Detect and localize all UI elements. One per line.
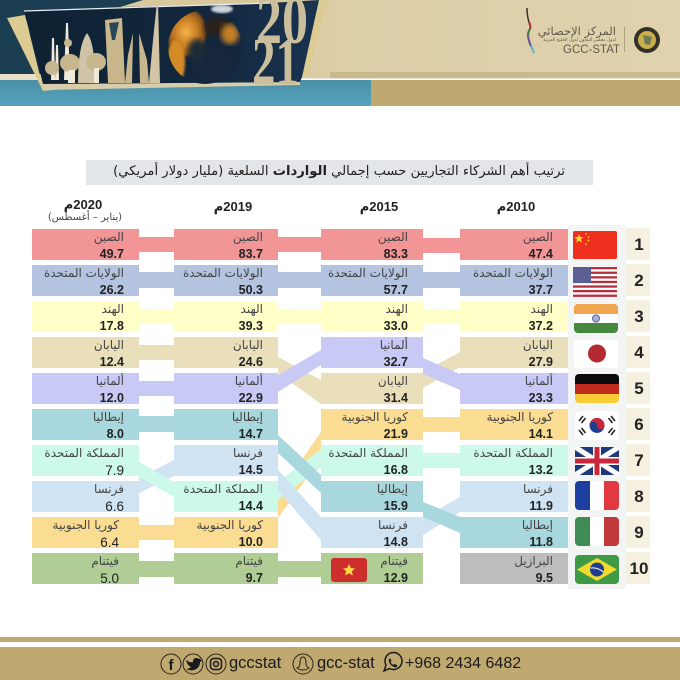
row: UK: المملكة المتحدة: [328, 446, 408, 460]
row: Vietnam: 9.7: [246, 571, 263, 585]
row: UK: المملكة المتحدة: [44, 446, 124, 460]
rank numbers: [626, 228, 650, 584]
row: France: فرنسا: [378, 518, 408, 532]
handle: gcc-stat: gcc-stat: [317, 654, 375, 672]
row: Italy: 14.7: [239, 427, 263, 441]
row: USA: الولايات المتحدة: [183, 266, 263, 280]
rank 10: 10: [630, 559, 648, 578]
row: India: الهند: [241, 302, 263, 316]
row: USA: 57.7: [384, 283, 408, 297]
rank 10: [626, 552, 650, 584]
row: Japan: اليابان: [378, 374, 408, 388]
row: India: الهند: [531, 302, 553, 316]
rank 6: [626, 408, 650, 440]
row: China: الصين: [233, 230, 263, 244]
row: Japan: اليابان: [523, 338, 553, 352]
row: UK: [460, 445, 568, 476]
row: USA: 26.2: [100, 283, 124, 297]
rank 8: [626, 480, 650, 512]
row: Germany: [174, 373, 278, 404]
row: Italy: إيطاليا: [377, 482, 408, 496]
row: China: [32, 229, 139, 260]
row: Italy: [321, 481, 423, 512]
row: Brazil: البرازيل: [514, 554, 553, 568]
flag: Germany: [575, 374, 619, 403]
row: UK: [321, 445, 423, 476]
icon: facebook: f: [168, 657, 174, 674]
header banner: [0, 0, 680, 106]
flag: Vietnam: [331, 558, 367, 582]
row: Japan: [174, 337, 278, 368]
year 2021: [252, 0, 308, 99]
year heading 2020: 2020م: [64, 197, 102, 212]
logo arabic subtitle: لدول مجلس التعاون لدول الخليج العربية: [543, 38, 616, 43]
row: India: [460, 301, 568, 332]
row: USA: [321, 265, 423, 296]
row: Japan: اليابان: [233, 338, 263, 352]
row: South Korea: كوريا الجنوبية: [342, 410, 408, 424]
row: France: فرنسا: [233, 446, 263, 460]
social icons and contacts: [160, 652, 521, 674]
year heading 2020: (يناير – أغسطس): [48, 212, 122, 223]
row: USA: 37.7: [529, 283, 553, 297]
rank 2: 2: [634, 271, 644, 290]
row: South Korea: [32, 517, 139, 548]
row: Japan: 27.9: [529, 355, 553, 369]
rank 9: [626, 516, 650, 548]
row: China: 47.4: [529, 247, 553, 261]
rank 7: 7: [634, 451, 644, 470]
row: Vietnam: فيتنام: [91, 554, 119, 568]
row: South Korea: [321, 409, 423, 440]
rank 2: [626, 264, 650, 296]
row: South Korea: كوريا الجنوبية: [197, 518, 263, 532]
row: Germany: 32.7: [384, 355, 408, 369]
flag: China: [573, 231, 617, 259]
column 2020: [32, 229, 139, 586]
logo emblem: [634, 27, 660, 53]
title bar: [86, 160, 593, 185]
row: Italy: [174, 409, 278, 440]
year heading 2010: 2010م: [497, 199, 535, 214]
flag: Italy: [575, 517, 619, 546]
row: Germany: [460, 373, 568, 404]
row: Japan: اليابان: [94, 338, 124, 352]
row: South Korea: 10.0: [239, 535, 263, 549]
row: China: [174, 229, 278, 260]
row: USA: الولايات المتحدة: [44, 266, 124, 280]
row: Vietnam with flag: فيتنام: [380, 554, 408, 568]
dark left background: [0, 0, 160, 74]
icon: twitter: [183, 654, 203, 674]
row: India: 37.2: [529, 319, 553, 333]
row: China: 49.7: [100, 247, 124, 261]
column 2010: [460, 229, 568, 585]
logo latin name: GCC-STAT: [563, 44, 620, 56]
row: Italy: إيطاليا: [232, 410, 263, 424]
row: Vietnam: 5.0: [100, 571, 119, 586]
row: UK: المملكة المتحدة: [473, 446, 553, 460]
flag panel background: [568, 225, 626, 589]
teal band: [0, 80, 371, 106]
row: France: [460, 481, 568, 512]
icon: facebook: [161, 654, 181, 674]
row: Italy: 8.0: [107, 427, 124, 441]
row: France: 6.6: [105, 499, 124, 514]
rank 5: 5: [634, 379, 644, 398]
row: UK: [32, 445, 139, 476]
row: Vietnam: [32, 553, 139, 584]
row: UK: المملكة المتحدة: [183, 482, 263, 496]
row: USA: الولايات المتحدة: [473, 266, 553, 280]
logo: [527, 8, 660, 56]
phone number: +968 2434 6482: [405, 655, 521, 672]
row: France: فرنسا: [523, 482, 553, 496]
rank 9: 9: [634, 523, 644, 542]
rank 1: [626, 228, 650, 260]
title bar: ترتيب أهم الشركاء التجاريين حسب إجمالي الواردات السلعية (مليار دولار أمريكي): [113, 164, 565, 179]
row: China: الصين: [378, 230, 408, 244]
row: South Korea: 21.9: [384, 427, 408, 441]
row: France: [32, 481, 139, 512]
row: France: 14.8: [384, 535, 408, 549]
row: India: الهند: [386, 302, 408, 316]
rank 7: [626, 444, 650, 476]
year heading 2019: 2019م: [214, 199, 252, 214]
row: India: 39.3: [239, 319, 263, 333]
year heading 2015: 2015م: [360, 199, 398, 214]
row: France: فرنسا: [94, 482, 124, 496]
row: China: [321, 229, 423, 260]
row: Germany: 23.3: [529, 391, 553, 405]
flag: France: [575, 481, 619, 510]
row: Italy: إيطاليا: [93, 410, 124, 424]
row: Italy: 15.9: [384, 499, 408, 513]
flag: Japan: [574, 340, 618, 368]
row: Vietnam: فيتنام: [235, 554, 263, 568]
row: South Korea: [460, 409, 568, 440]
row: France: [174, 445, 278, 476]
row: UK: 7.9: [105, 463, 124, 478]
row: Germany: ألمانيا: [525, 374, 553, 388]
row: Japan: [460, 337, 568, 368]
row: Germany: [321, 337, 423, 368]
row: Vietnam: [174, 553, 278, 584]
row: Vietnam with flag: 12.9: [384, 571, 408, 585]
row: South Korea: كوريا الجنوبية: [53, 518, 119, 532]
row: Brazil: 9.5: [536, 571, 553, 585]
row: France: 14.5: [239, 463, 263, 477]
rank 5: [626, 372, 650, 404]
row: Germany: ألمانيا: [380, 338, 408, 352]
row: South Korea: [174, 517, 278, 548]
handle: gccstat: gccstat: [229, 654, 282, 672]
row: South Korea: كوريا الجنوبية: [487, 410, 553, 424]
row: UK: 16.8: [384, 463, 408, 477]
flag: USA: [573, 267, 617, 297]
row: Vietnam with flag: [321, 553, 423, 584]
row: Japan: [32, 337, 139, 368]
rank 4: 4: [634, 343, 644, 362]
row: Germany: 12.0: [100, 391, 124, 405]
flag: United Kingdom: [575, 447, 619, 475]
rank 1: 1: [634, 235, 644, 254]
row: Italy: [32, 409, 139, 440]
row: Italy: إيطاليا: [522, 518, 553, 532]
icon: whatsapp: [384, 652, 402, 671]
row: UK: [174, 481, 278, 512]
icon: instagram: [206, 654, 226, 674]
row: France: 11.9: [529, 499, 553, 513]
row: China: الصين: [94, 230, 124, 244]
row: USA: الولايات المتحدة: [328, 266, 408, 280]
row: Germany: ألمانيا: [235, 374, 263, 388]
row: Japan: 24.6: [239, 355, 263, 369]
row: India: [32, 301, 139, 332]
row: UK: 13.2: [529, 463, 553, 477]
row: Germany: ألمانيا: [96, 374, 124, 388]
flag: South Korea: [575, 411, 619, 440]
row: India: الهند: [102, 302, 124, 316]
row: UK: 14.4: [239, 499, 263, 513]
tan band: [371, 80, 680, 106]
row: India: 33.0: [384, 319, 408, 333]
row: China: 83.7: [239, 247, 263, 261]
rank 6: 6: [634, 415, 644, 434]
row: USA: [460, 265, 568, 296]
picture frame: [7, 15, 127, 91]
row: China: [460, 229, 568, 260]
row: USA: [174, 265, 278, 296]
skyline: [45, 2, 160, 83]
footer band: [0, 637, 680, 680]
rank 3: 3: [634, 307, 644, 326]
row: China: الصين: [523, 230, 553, 244]
logo arabic name: المركز الإحصائي: [538, 24, 616, 39]
row: Brazil: [460, 553, 568, 584]
row: China: 83.3: [384, 247, 408, 261]
icon: snapchat: [293, 654, 313, 674]
row: Germany: 22.9: [239, 391, 263, 405]
row: USA: [32, 265, 139, 296]
row: India: [321, 301, 423, 332]
globe: [166, 5, 242, 84]
row: India: 17.8: [100, 319, 124, 333]
rank 4: [626, 336, 650, 368]
column 2019: [174, 229, 278, 585]
row: Japan: 12.4: [100, 355, 124, 369]
row: Japan: 31.4: [384, 391, 408, 405]
flag: India: [574, 304, 618, 333]
flag: Brazil: [575, 555, 619, 584]
row: Japan: [321, 373, 423, 404]
row: South Korea: 14.1: [529, 427, 553, 441]
year heading 2020: [48, 197, 122, 223]
picture: [24, 0, 319, 84]
rank 8: 8: [634, 487, 644, 506]
column 2015: [321, 229, 423, 585]
row: Italy: [460, 517, 568, 548]
row: USA: 50.3: [239, 283, 263, 297]
row: France: [321, 517, 423, 548]
row: India: [174, 301, 278, 332]
logo ribbon: [527, 8, 534, 53]
row: Germany: [32, 373, 139, 404]
row: Italy: 11.8: [529, 535, 553, 549]
row: South Korea: 6.4: [100, 535, 119, 550]
year 2021: 21: [252, 23, 299, 99]
rank 3: [626, 300, 650, 332]
